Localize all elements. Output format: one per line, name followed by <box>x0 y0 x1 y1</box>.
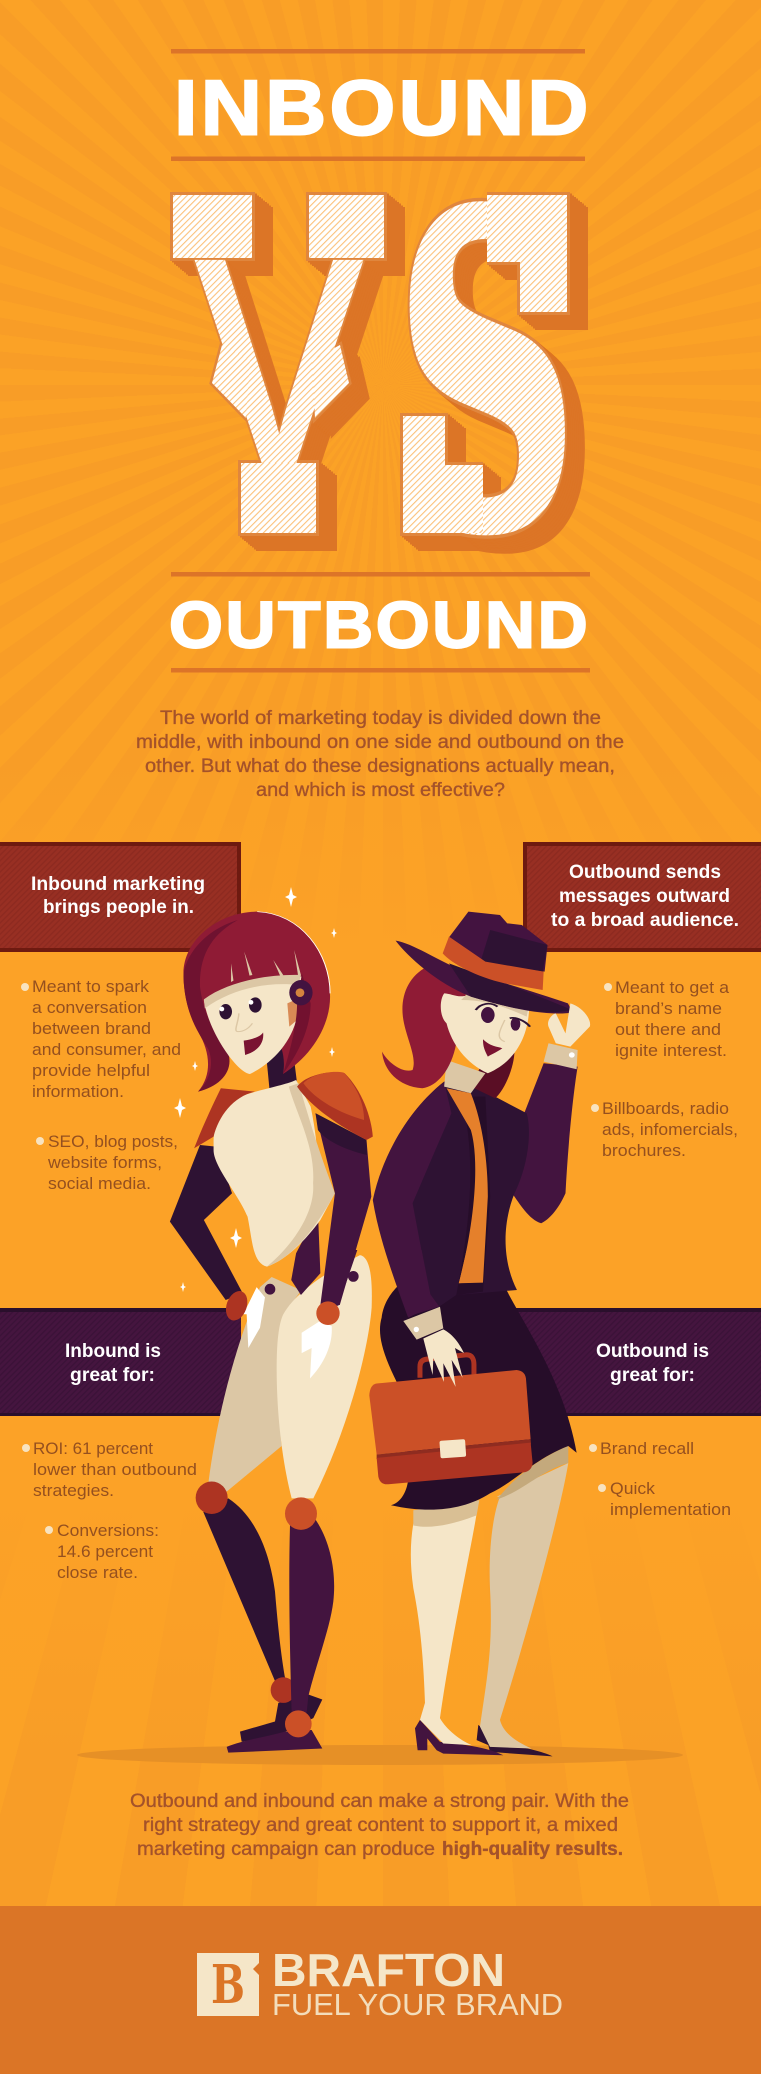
title: inbound: INBOUND <box>174 65 592 152</box>
sparkles <box>174 887 337 1292</box>
bullets: inbound what it is: provide helpful <box>32 1061 150 1080</box>
heading: inbound is great for: great for: <box>70 1365 155 1386</box>
bullets: inbound strengths: strategies. <box>33 1481 114 1500</box>
bullets: outbound what it is: brand’s name <box>615 999 722 1018</box>
bullets: outbound what it is: Meant to get a <box>615 978 730 997</box>
icon: hat <box>396 912 573 1014</box>
panel: outbound great for <box>505 1308 761 1416</box>
intro text <box>136 708 624 801</box>
bullets: outbound what it is: Billboards, radio <box>602 1099 729 1118</box>
closing text: marketing campaign can produce <box>137 1839 435 1860</box>
heading: outbound is great for: great for: <box>610 1365 695 1386</box>
bullets: inbound what it is <box>21 977 181 1193</box>
bullets: inbound strengths: Conversions: <box>57 1521 159 1540</box>
heading: inbound is great for: Inbound is <box>65 1341 161 1362</box>
bullets: inbound what it is: a conversation <box>32 998 147 1017</box>
heading: outbound sends: messages outward <box>559 886 730 907</box>
bullets: inbound strengths: 14.6 percent <box>57 1542 153 1561</box>
head <box>183 912 330 1092</box>
legs, skirt, shoes <box>380 1284 577 1756</box>
bullets: inbound what it is: website forms, <box>47 1153 162 1172</box>
panel: inbound great for <box>0 1308 241 1416</box>
bullets: inbound what it is: Meant to spark <box>32 977 150 996</box>
logo wordmark: FUEL YOUR BRAND <box>272 1987 563 2022</box>
hand and briefcase <box>369 1250 533 1484</box>
jacket and head <box>373 912 590 1317</box>
heading: outbound is great for: Outbound is <box>596 1341 709 1362</box>
title: big ornamental VS: S <box>397 125 576 624</box>
heading: outbound sends: to a broad audience. <box>551 910 739 931</box>
title: big ornamental VS <box>170 125 576 624</box>
logo wordmark: BRAFTON <box>272 1944 505 1996</box>
intro text: other. But what do these designations actually mean, <box>145 756 615 777</box>
heading: inbound marketing: brings people in. <box>43 897 194 918</box>
bullets: inbound what it is: social media. <box>48 1174 151 1193</box>
bullets: outbound what it is: brochures. <box>602 1141 686 1160</box>
bullets: inbound what it is: information. <box>32 1082 124 1101</box>
bullets: inbound strengths: ROI: 61 percent <box>33 1439 153 1458</box>
heading: outbound sends <box>551 862 739 931</box>
closing text: right strategy and great content to support it, a mixed <box>143 1815 618 1836</box>
panel: outbound definition <box>523 842 761 952</box>
bullets: outbound what it is: out there and <box>615 1020 721 1039</box>
bullets: inbound strengths: lower than outbound <box>33 1460 197 1479</box>
heading: inbound marketing <box>31 874 205 918</box>
bullets: inbound strengths: close rate. <box>57 1563 138 1582</box>
heading: inbound is great for <box>65 1341 161 1386</box>
bullets: outbound what it is: ads, infomercials, <box>602 1120 738 1139</box>
closing text: Outbound and inbound can make a strong pair. With the <box>130 1791 629 1812</box>
intro text: The world of marketing today is divided down the <box>160 708 601 729</box>
illustration: robot woman, inbound <box>170 887 373 1753</box>
heading: inbound marketing: Inbound marketing <box>31 874 205 895</box>
footer band <box>0 1906 761 2074</box>
logo wordmark <box>272 1944 563 2022</box>
torso and arms <box>170 1037 373 1305</box>
bullets: outbound strengths: implementation <box>610 1500 731 1519</box>
intro text: and which is most effective? <box>256 780 505 801</box>
illustration: detective woman, outbound <box>369 912 590 1756</box>
heading: outbound sends: Outbound sends <box>569 862 721 883</box>
hips, hands <box>222 1250 359 1378</box>
bullets: outbound strengths: Brand recall <box>600 1439 694 1458</box>
title: outbound: OUTBOUND <box>169 589 590 662</box>
bullets: outbound strengths <box>589 1439 731 1519</box>
intro text: middle, with inbound on one side and outbound on the <box>136 732 624 753</box>
bullets: inbound what it is: and consumer, and <box>32 1040 181 1059</box>
panel: inbound definition <box>0 842 241 952</box>
bullets: outbound strengths: Quick <box>610 1479 656 1498</box>
bullets: inbound what it is: between brand <box>32 1019 151 1038</box>
ground shadow <box>77 1745 683 1765</box>
bullets: outbound what it is: ignite interest. <box>615 1041 727 1060</box>
closing text <box>130 1791 629 1860</box>
bullets: inbound strengths <box>22 1439 197 1582</box>
bullets: inbound what it is: SEO, blog posts, <box>48 1132 178 1151</box>
closing text: high-quality results. <box>442 1839 623 1860</box>
icon: Brafton logo mark: B <box>211 1954 245 2016</box>
title: big ornamental VS: V <box>198 199 361 534</box>
legs and feet <box>196 1255 372 1753</box>
title: big ornamental VS: V <box>198 199 361 534</box>
heading: outbound is great for <box>596 1341 709 1386</box>
bullets: outbound what it is <box>591 978 738 1160</box>
icon: briefcase <box>369 1370 533 1484</box>
title: big ornamental VS: S <box>397 125 576 624</box>
